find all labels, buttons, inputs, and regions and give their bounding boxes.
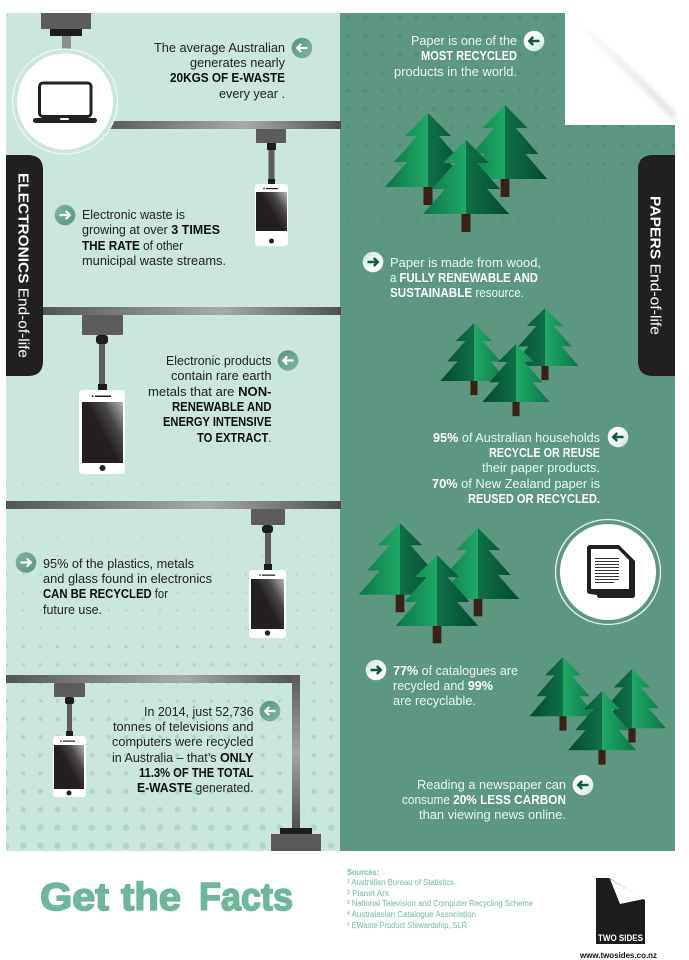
icon: arrow <box>366 660 386 680</box>
phone 2 with cable <box>79 315 125 474</box>
text: households recycle or reuse: RECYCLE OR REUSE <box>489 445 600 460</box>
text: 3 times the rate: growing at over 3 TIMES <box>82 222 220 237</box>
text: rare earth metals: ENERGY INTENSIVE <box>163 414 272 429</box>
top plug <box>41 13 91 54</box>
phone 1 with cable <box>255 129 288 246</box>
text: sources <box>347 868 534 930</box>
connector rails <box>6 121 341 830</box>
text: 95% can be recycled: CAN BE RECYCLED for <box>43 586 169 601</box>
icon: arrow <box>278 350 298 371</box>
text: 95% can be recycled: future use. <box>43 602 102 617</box>
icon: arrow <box>260 701 280 721</box>
text: households recycle or reuse: their paper products. <box>482 460 600 475</box>
icon: arrow <box>16 552 36 573</box>
text: fully renewable: SUSTAINABLE resource. <box>390 285 524 300</box>
icon: arrow <box>363 252 383 272</box>
text: 20kgs of e-waste <box>154 40 285 101</box>
icon: arrow <box>55 205 75 225</box>
trees: cluster 4 <box>529 657 666 765</box>
text: fully renewable: a FULLY RENEWABLE AND <box>390 270 538 285</box>
heading: get the facts: Get <box>40 876 109 919</box>
text: most recycled <box>394 33 517 79</box>
text: only 11.3%: 11.3% OF THE TOTAL <box>139 765 254 780</box>
phone 3 with cable <box>249 509 286 638</box>
text: rare earth metals: metals that are NON- <box>148 384 272 399</box>
trees: cluster 1 <box>385 105 547 232</box>
text: sources: National Television and Computer Recycling Scheme <box>350 899 534 908</box>
text: only 11.3%: In 2014, just 52,736 <box>144 704 254 719</box>
text: 3 times the rate: Electronic waste is <box>82 207 185 222</box>
text: sources: 3 <box>347 900 350 906</box>
icon: arrow <box>292 38 312 58</box>
icon: document in circle <box>556 520 660 624</box>
icon: arrow <box>573 775 593 795</box>
text: sources: 5 <box>347 922 350 928</box>
logo: two sides: TWO SIDES <box>598 933 643 944</box>
text: 20kgs of e-waste: 20KGS OF E-WASTE <box>170 70 285 85</box>
heading: get the facts: Facts <box>199 876 293 919</box>
text: rare earth metals: TO EXTRACT. <box>197 430 272 445</box>
text: most recycled: MOST RECYCLED <box>421 48 517 63</box>
icon: laptop in circle <box>12 49 118 154</box>
text: fully renewable: Paper is made from wood, <box>390 255 541 270</box>
text: sources: 2 <box>347 890 350 896</box>
text: most recycled: Paper is one of the <box>411 33 517 48</box>
text: 20% less carbon: consume 20% LESS CARBON <box>402 792 566 807</box>
text: households recycle or reuse: 95% of Australian households <box>433 430 600 445</box>
heading: get the facts <box>40 876 293 919</box>
trees: cluster 3 <box>359 523 519 643</box>
text: catalogues: are recyclable. <box>393 693 476 708</box>
trees: cluster 2 <box>440 308 579 416</box>
text: households recycle or reuse: REUSED OR RECYCLED. <box>468 491 600 506</box>
text: sources: Sources: <box>347 868 379 877</box>
icon: arrow <box>608 427 628 447</box>
panel: electronics background <box>6 13 340 851</box>
tab: papers end-of-life: PAPERS End-of-life <box>646 196 664 335</box>
text: only 11.3%: in Australia – that’s ONLY <box>112 750 254 765</box>
text: fully renewable <box>390 255 541 300</box>
text: sources: Australasian Catalogue Association <box>350 910 476 919</box>
text: households recycle or reuse <box>432 430 600 506</box>
text: most recycled: products in the world. <box>394 64 517 79</box>
text: only 11.3%: tonnes of televisions and <box>113 719 254 734</box>
text: 20kgs of e-waste: generates nearly <box>190 55 285 70</box>
text: households recycle or reuse: 70% of New Zealand paper is <box>432 476 600 491</box>
text: rare earth metals: Electronic products <box>166 353 272 368</box>
text: 95% can be recycled <box>43 556 212 617</box>
text: rare earth metals: RENEWABLE AND <box>172 399 272 414</box>
heading: get the facts: the <box>121 876 181 919</box>
text: sources: EWaste Product Stewardship, SLR <box>350 921 467 930</box>
text: website: www.twosides.co.nz <box>579 950 657 960</box>
text: 3 times the rate: THE RATE of other <box>82 238 184 253</box>
text: 3 times the rate <box>82 207 226 268</box>
text: rare earth metals <box>148 353 272 445</box>
panel: papers background <box>340 13 675 851</box>
text: sources: Australian Bureau of Statistics <box>350 878 454 887</box>
tab: papers end-of-life <box>638 155 675 376</box>
tab: electronics end-of-life: ELECTRONICS End-of-life <box>14 173 32 358</box>
text: catalogues: 77% of catalogues are <box>393 663 518 678</box>
text: only 11.3%: E-WASTE generated. <box>137 780 254 795</box>
text: 95% can be recycled: 95% of the plastics, metals <box>43 556 194 571</box>
text: sources: Planet Ark <box>350 889 390 898</box>
text: 95% can be recycled: and glass found in electronics <box>43 571 212 586</box>
logo: two sides <box>596 878 645 944</box>
text: rare earth metals: contain rare earth <box>171 368 272 383</box>
text: 3 times the rate: municipal waste streams. <box>82 253 226 268</box>
text: 20% less carbon: Reading a newspaper can <box>417 777 566 792</box>
text: catalogues <box>393 663 518 708</box>
text: 20% less carbon: than viewing news online. <box>419 807 566 822</box>
text: only 11.3%: computers were recycled <box>112 734 254 749</box>
text: sources: 4 <box>347 911 350 917</box>
phone 4 with cable <box>53 683 86 797</box>
text: 20kgs of e-waste: The average Australian <box>154 40 285 55</box>
text: catalogues: recycled and 99% <box>393 678 493 693</box>
rail base plug <box>271 828 321 851</box>
text: 20% less carbon <box>402 777 566 822</box>
page corner fold <box>565 13 689 125</box>
text: 20kgs of e-waste: every year . <box>219 86 285 101</box>
text: only 11.3% <box>112 704 254 795</box>
icon: arrow <box>524 31 544 51</box>
tab: electronics end-of-life <box>6 155 43 376</box>
text: sources: 1 <box>347 879 350 885</box>
